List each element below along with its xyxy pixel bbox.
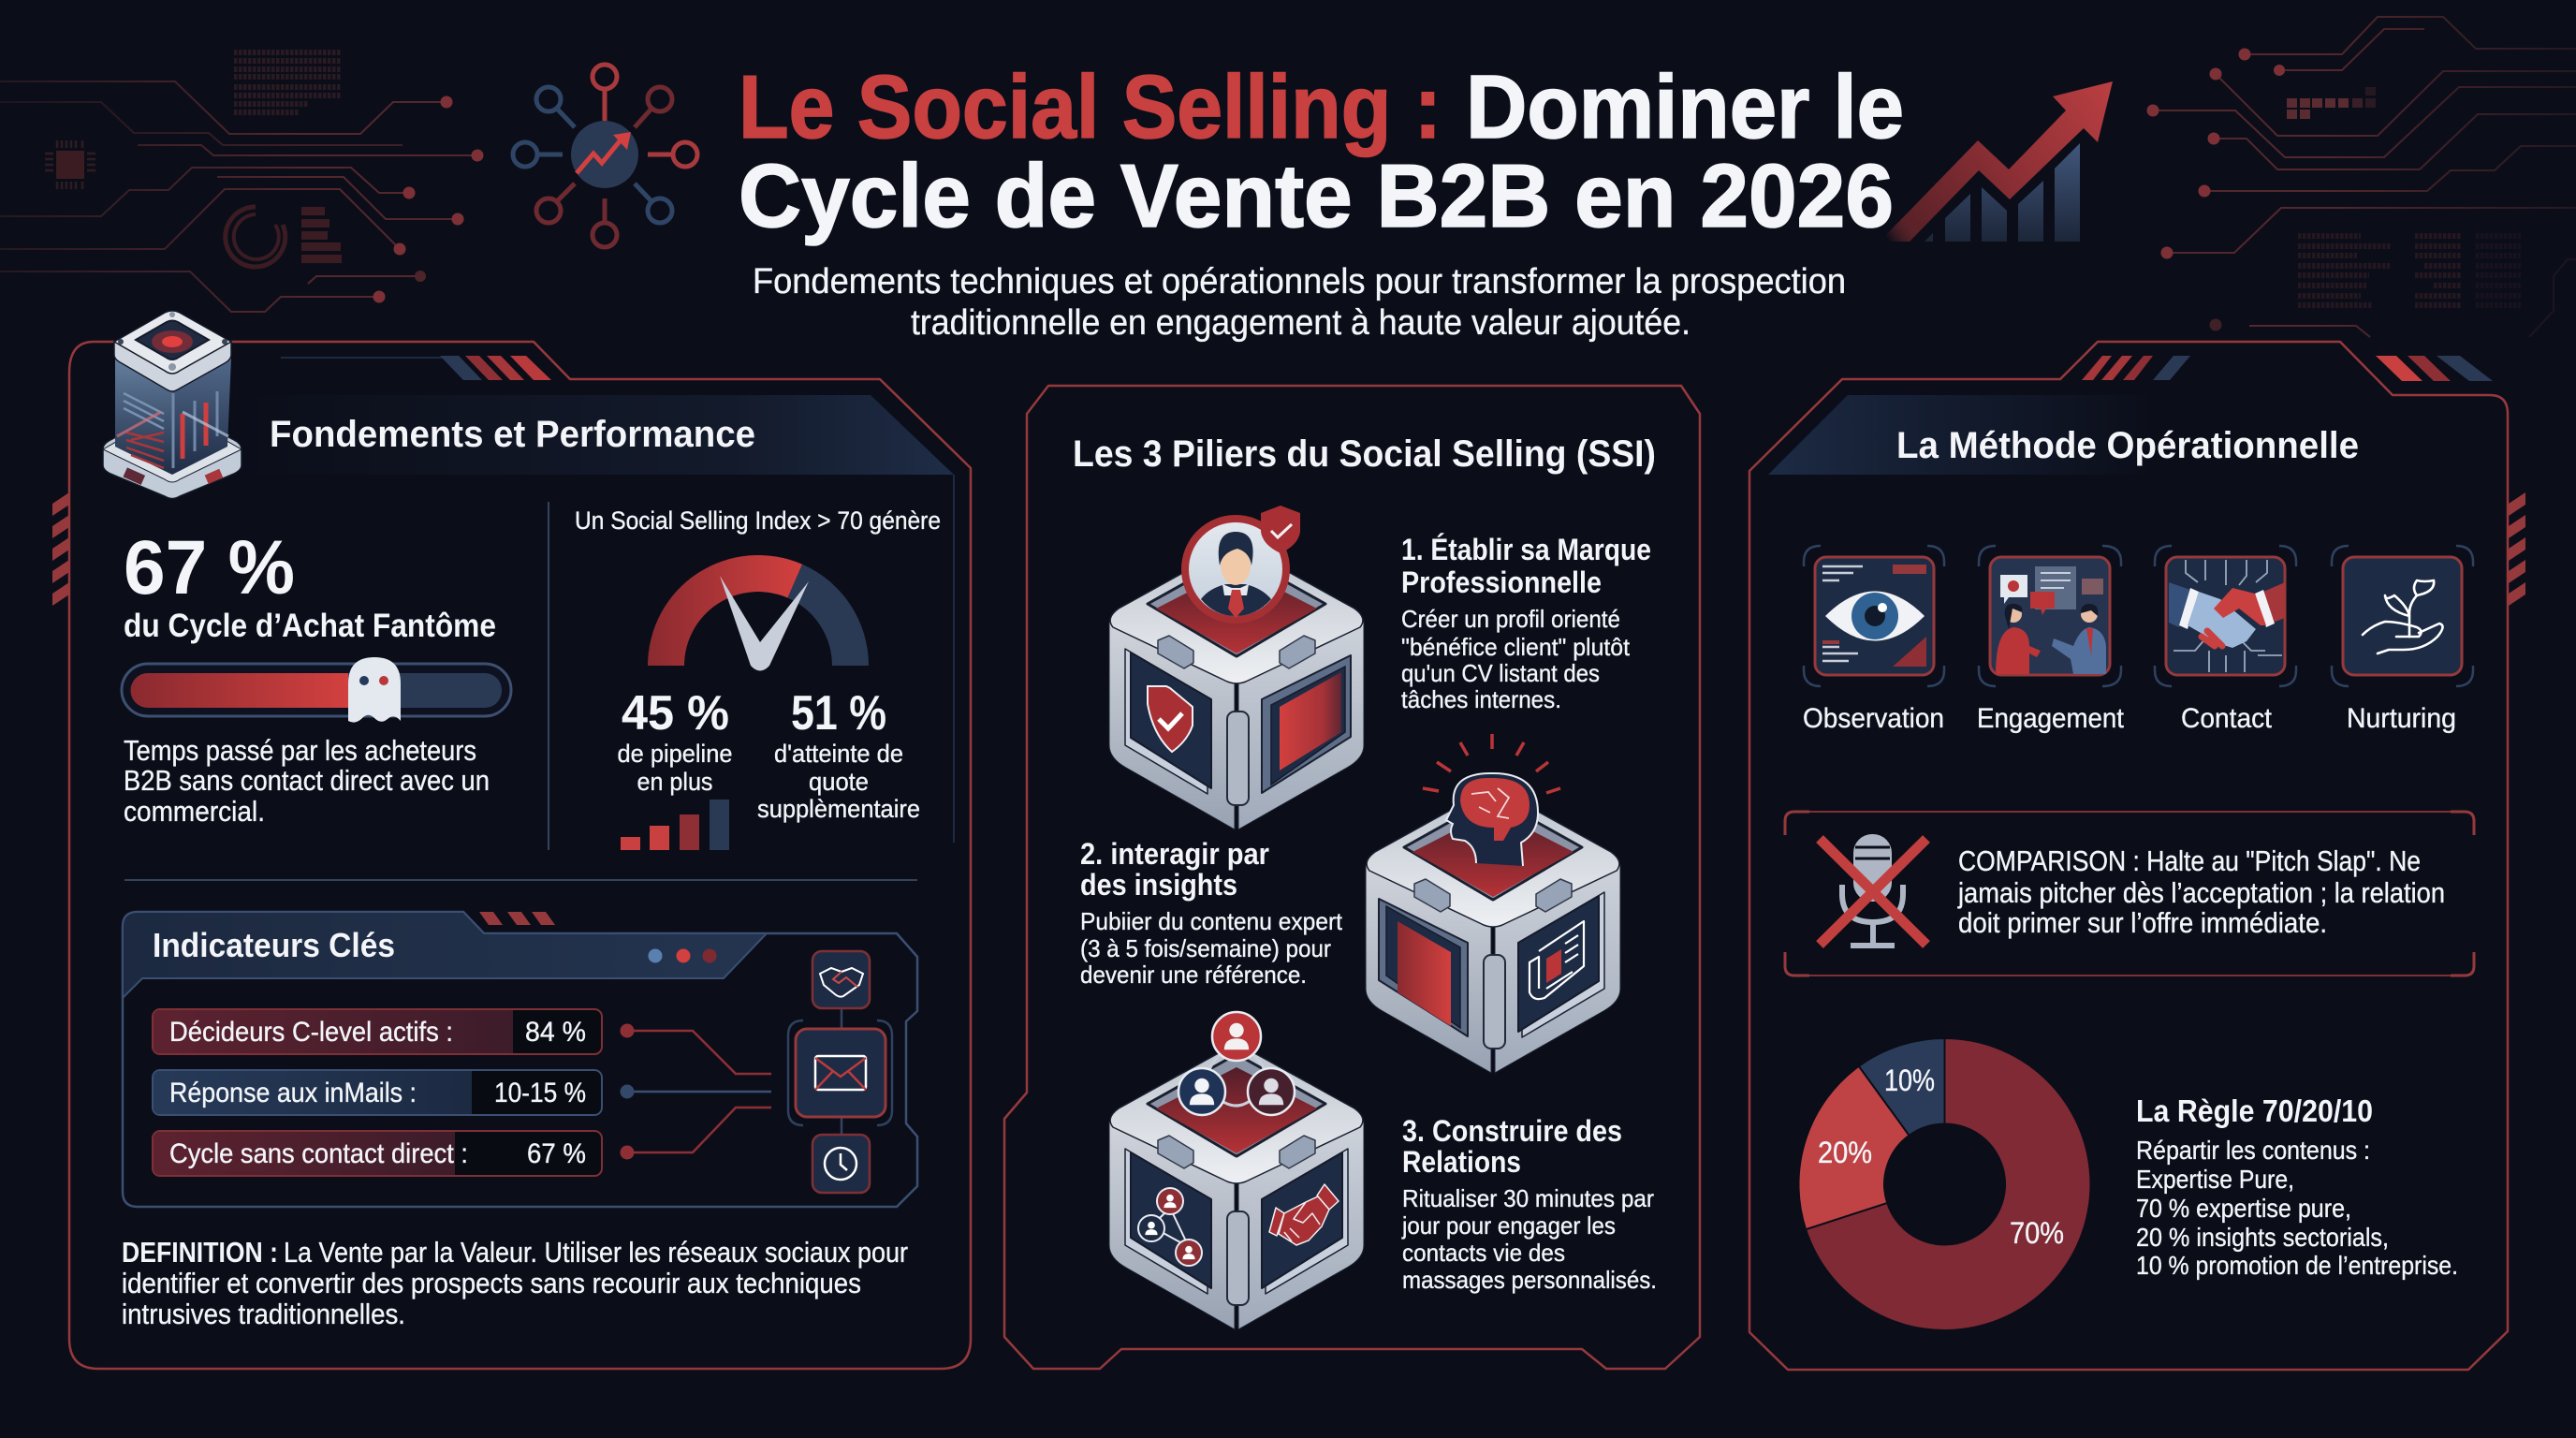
shield icon <box>1148 686 1193 752</box>
donut chart: 70% <box>2010 1216 2064 1250</box>
icon: observation eye <box>1804 546 1944 686</box>
stat: 45 %: de pipeline <box>618 740 732 768</box>
title <box>739 57 1904 246</box>
row: décideurs: 84 % <box>525 1017 586 1048</box>
step labels: Observation <box>1803 703 1944 734</box>
panel: Indicateurs Clés <box>123 912 917 1207</box>
gauge <box>648 555 869 670</box>
donut chart: 20% <box>1818 1136 1872 1169</box>
stat: 67 %: du Cycle d’Achat Fantôme <box>124 608 496 644</box>
stat: 67 % <box>124 525 496 644</box>
icon: contact handshake <box>2155 546 2296 686</box>
row: inmails: Réponse aux inMails : <box>169 1078 417 1108</box>
text: règle 70/20/10: 10 % promotion de l’entreprise. <box>2136 1251 2458 1280</box>
heading: La Méthode Opérationnelle <box>1896 425 2359 466</box>
subtitle <box>753 262 1846 343</box>
red panel <box>1262 655 1351 793</box>
callout text: doit primer sur l’offre immédiate. <box>1958 906 2327 939</box>
cube 1 <box>1109 506 1364 829</box>
mini network icon <box>1138 1188 1202 1266</box>
panel: La Méthode Opérationnelle <box>1749 342 2525 1370</box>
panel: Les 3 Piliers <box>1004 386 1700 1369</box>
row: inmails: 10-15 % <box>494 1078 586 1108</box>
pillar 3 text: 3. Construire des <box>1402 1114 1622 1148</box>
stat: 45 %: en plus <box>637 768 713 796</box>
badge shield <box>1261 506 1300 553</box>
row: inmails <box>153 1070 602 1115</box>
stat: 51 %: quote <box>809 768 869 796</box>
heading: Fondements et Performance <box>270 414 755 455</box>
mini bar chart <box>621 800 729 850</box>
callout text <box>1957 844 2445 939</box>
donut chart <box>1798 1038 2090 1330</box>
text: temps passé: commercial. <box>124 795 265 828</box>
definition text <box>122 1236 908 1330</box>
callout text: COMPARISON : Halte au "Pitch Slap". Ne <box>1958 844 2421 877</box>
row: décideurs <box>153 1009 602 1054</box>
pillar 3 text: jour pour engager les <box>1401 1211 1616 1240</box>
icon: nurturing plant <box>2332 546 2473 686</box>
definition text: DEFINITION : <box>122 1236 278 1269</box>
pillar 1 text: "bénéfice client" plutôt <box>1401 633 1631 661</box>
background circuit right <box>2147 17 2576 337</box>
text: temps passé: Temps passé par les acheteurs <box>124 734 476 767</box>
pillar 2 text: (3 à 5 fois/semaine) pour <box>1080 934 1331 962</box>
definition text: intrusives traditionnelles. <box>122 1298 405 1330</box>
news icon <box>1530 921 1584 999</box>
icon: engagement <box>1979 546 2121 686</box>
mini handshake icon <box>1269 1184 1339 1245</box>
heading: Les 3 Piliers du Social Selling (SSI) <box>1073 433 1656 475</box>
icon: crossed microphone <box>1820 834 1926 946</box>
pillar 1 text: tâches internes. <box>1401 685 1561 713</box>
stat: 51 %: supplèmentaire <box>757 795 920 823</box>
avatar <box>1185 519 1286 620</box>
connectors <box>620 1008 892 1159</box>
icon: ghost <box>348 657 401 723</box>
pillar 3 text: massages personnalisés. <box>1402 1266 1657 1294</box>
step labels: Nurturing <box>2347 703 2456 734</box>
donut chart: 10% <box>1884 1064 1935 1097</box>
pillar 3 text: contacts vie des <box>1402 1239 1565 1267</box>
icon: clock <box>812 1135 870 1193</box>
step labels: Engagement <box>1977 703 2125 734</box>
red panel <box>1379 899 1468 1036</box>
pillar 2 text: Pubiier du contenu expert <box>1080 907 1343 935</box>
background circuit left <box>0 52 483 312</box>
icon: social network hub <box>513 65 697 247</box>
step labels <box>1803 703 2456 734</box>
pillar 2 text: des insights <box>1080 868 1237 902</box>
text: règle 70/20/10 <box>2136 1093 2458 1280</box>
text: règle 70/20/10: 70 % expertise pure, <box>2136 1194 2351 1223</box>
pillar 1 text <box>1401 533 1651 713</box>
icon: envelope <box>796 1029 886 1117</box>
text: règle 70/20/10: Expertise Pure, <box>2136 1165 2294 1194</box>
pillar 2 text: 2. interagir par <box>1080 837 1269 871</box>
pillar 3 text: Ritualiser 30 minutes par <box>1402 1184 1654 1212</box>
progress bar with ghost <box>122 657 511 723</box>
row: cycle: 67 % <box>527 1138 586 1169</box>
head with brain <box>1423 734 1560 866</box>
icon: handshake small <box>812 951 870 1008</box>
pillar 3 text: Relations <box>1402 1145 1521 1179</box>
definition text: identifier et convertir des prospects sans recourir aux techniques <box>122 1267 861 1299</box>
text: règle 70/20/10: Répartir les contenus : <box>2136 1136 2370 1165</box>
row: décideurs: Décideurs C-level actifs : <box>169 1017 453 1048</box>
pillar 1 text: 1. Établir sa Marque <box>1401 533 1651 566</box>
row: cycle: Cycle sans contact direct : <box>169 1138 468 1169</box>
text: règle 70/20/10: 20 % insights sectorials, <box>2136 1223 2389 1252</box>
stat: 45 %: 45 % <box>622 686 729 741</box>
people network <box>1178 1012 1295 1115</box>
cube 2 <box>1366 734 1620 1073</box>
pillar 1 text: qu'un CV listant des <box>1401 659 1600 687</box>
icon: growth arrow chart <box>1880 81 2113 242</box>
cube 3 <box>1109 1012 1364 1329</box>
title: Cycle de Vente B2B en 2026 <box>739 146 1894 246</box>
subtitle: Fondements techniques et opérationnels pour transformer la prospection <box>753 262 1846 301</box>
text: temps passé <box>124 734 490 828</box>
text: règle 70/20/10: La Règle 70/20/10 <box>2136 1093 2373 1128</box>
text: temps passé: B2B sans contact direct avec un <box>124 764 490 797</box>
callout: comparison <box>1785 812 2474 976</box>
stat: 51 %: 51 % <box>791 686 886 741</box>
step labels: Contact <box>2181 703 2273 734</box>
icon: server cube <box>103 311 242 498</box>
text: SSI intro: Un Social Selling Index > 70 génère <box>575 506 941 535</box>
pillar 3 text <box>1401 1114 1657 1294</box>
pillar 2 text: devenir une référence. <box>1080 961 1307 989</box>
pillar 1 text: Professionnelle <box>1401 565 1602 599</box>
definition text: La Vente par la Valeur. Utiliser les réseaux sociaux pour <box>284 1236 908 1269</box>
subtitle: traditionnelle en engagement à haute valeur ajoutée. <box>911 303 1690 343</box>
pillar 1 text: Créer un profil orienté <box>1401 605 1620 633</box>
row: cycle <box>153 1131 602 1176</box>
stat: 67 %: 67 % <box>124 525 295 610</box>
title: Le Social Selling : <box>739 57 1442 157</box>
panel: Fondements et Performance <box>52 311 971 1369</box>
pillar 2 text <box>1080 837 1343 989</box>
stat: 45 % <box>618 686 732 796</box>
stat: 51 % <box>757 686 920 823</box>
title: Dominer le <box>1466 57 1904 157</box>
callout text: jamais pitcher dès l’acceptation ; la relation <box>1957 876 2445 909</box>
heading: Indicateurs Clés <box>153 926 395 964</box>
stat: 51 %: d'atteinte de <box>774 740 903 768</box>
